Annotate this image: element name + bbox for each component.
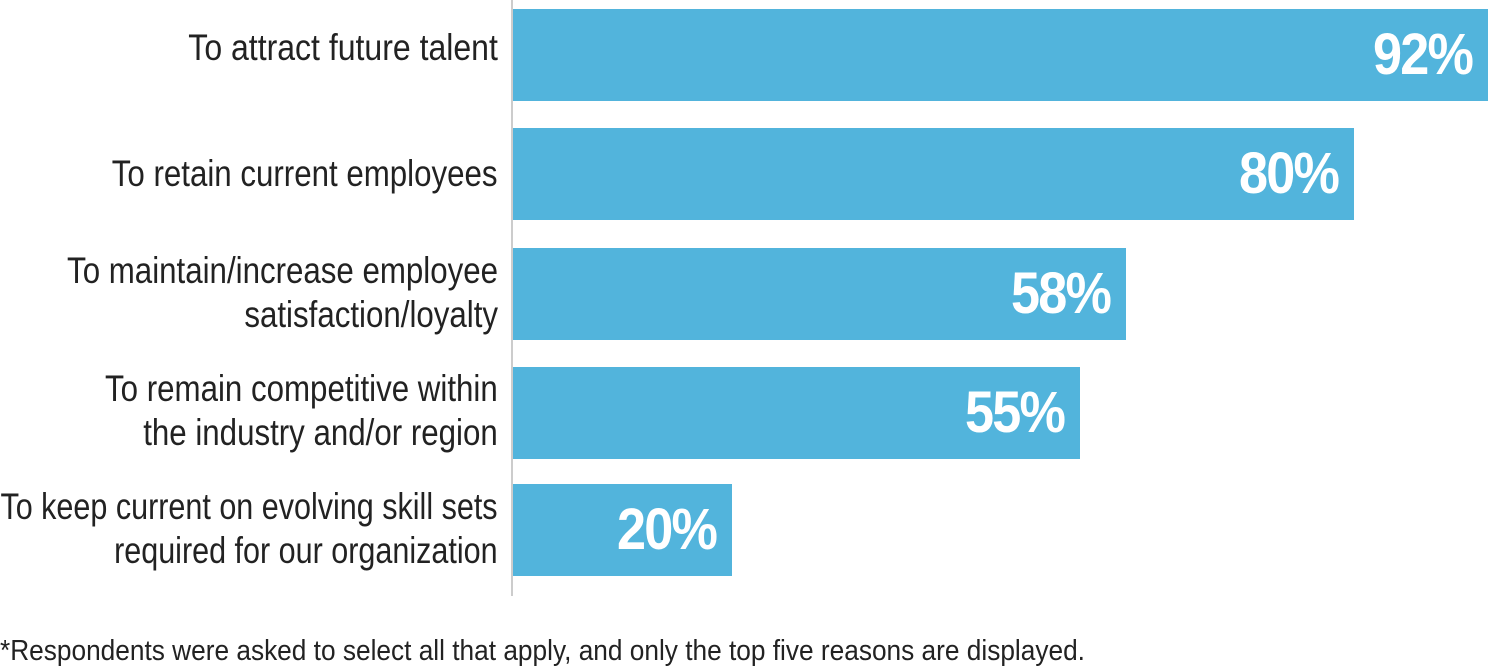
- bar 1: 92%: [1373, 22, 1472, 87]
- label 5: required for our organization: [115, 530, 498, 571]
- label 4: [105, 368, 498, 453]
- label 5: To keep current on evolving skill sets: [1, 486, 498, 527]
- label 4: the industry and/or region: [143, 412, 498, 453]
- label 3: satisfaction/loyalty: [244, 294, 498, 335]
- bar 5: [513, 484, 732, 576]
- bar 1: [513, 9, 1488, 101]
- bar 5: 20%: [617, 497, 716, 562]
- label 5: [1, 486, 498, 571]
- bar 2: [513, 128, 1354, 220]
- label 3: To maintain/increase employee: [67, 250, 498, 291]
- bar 3: 58%: [1011, 261, 1110, 326]
- bar 3: [513, 248, 1126, 340]
- footnote: *Respondents were asked to select all that apply, and only the top five reasons are displayed.: [0, 635, 1085, 667]
- axis line: [511, 0, 513, 596]
- label 3: [67, 250, 498, 335]
- bar 2: 80%: [1239, 141, 1338, 206]
- label 1: To attract future talent: [188, 27, 498, 68]
- bar 4: [513, 367, 1080, 459]
- label 2: To retain current employees: [112, 153, 498, 194]
- label 4: To remain competitive within: [105, 368, 498, 409]
- bar 4: 55%: [965, 380, 1064, 445]
